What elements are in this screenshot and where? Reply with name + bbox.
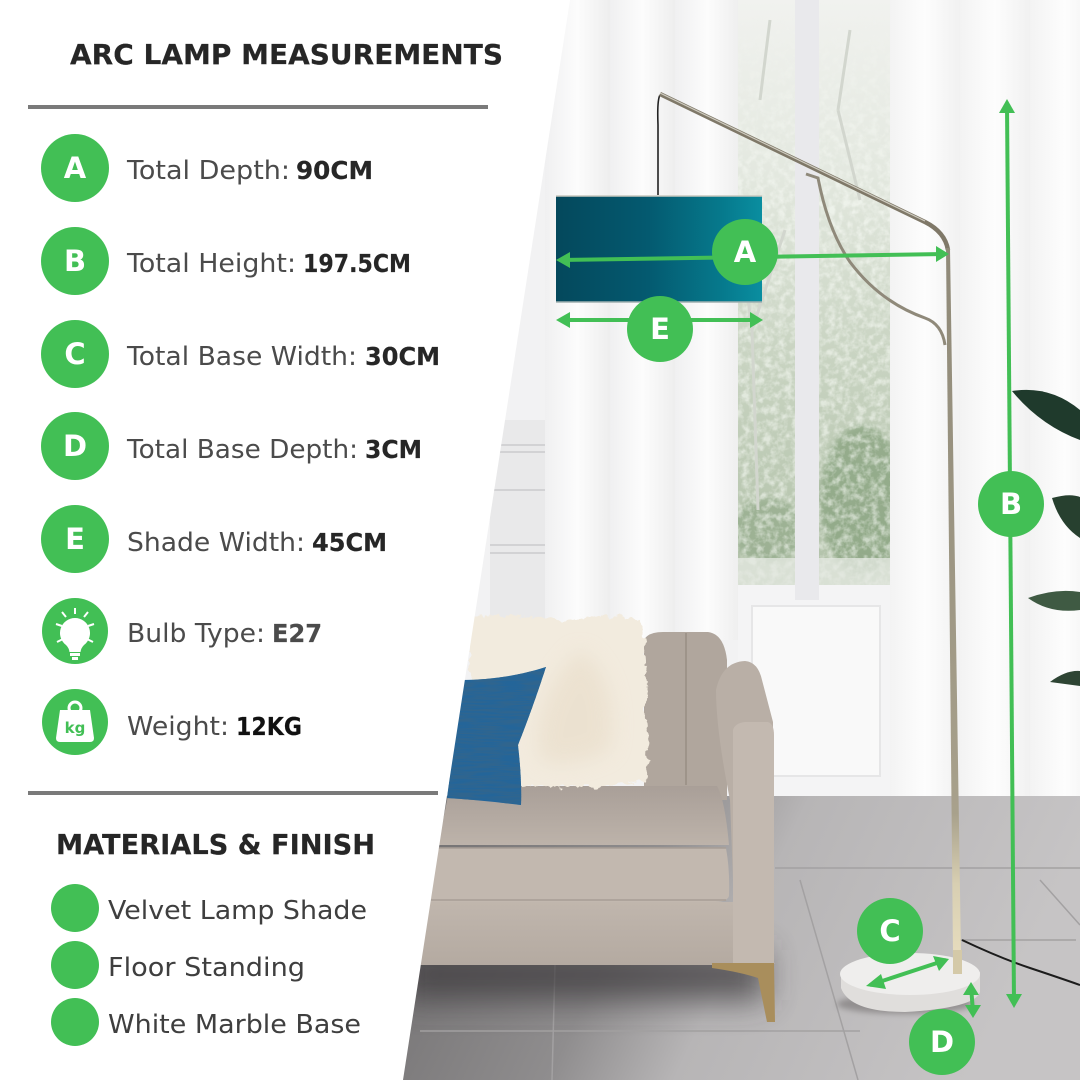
dimension D: base depth arrow: D bbox=[930, 1025, 954, 1059]
dimension E: shade width arrow: E bbox=[650, 312, 670, 346]
sofa seat front bbox=[430, 848, 729, 902]
row B: total height: Total Height: bbox=[126, 249, 296, 279]
row A: total depth: Total Depth: bbox=[126, 156, 290, 186]
material: velvet lamp shade: Velvet Lamp Shade bbox=[108, 896, 367, 926]
lamp base shadow bbox=[837, 994, 973, 1014]
dimension A: total depth arrow: A bbox=[734, 235, 757, 269]
dimension C: base width arrow: C bbox=[879, 914, 901, 948]
dimension E: shade width arrow bbox=[556, 296, 763, 362]
sofa leg bbox=[712, 963, 775, 1022]
materials heading: MATERIALS & FINISH bbox=[56, 828, 375, 861]
row: weight: Weight: bbox=[127, 712, 229, 742]
photo scene: living room bbox=[400, 0, 1080, 1080]
row A: total depth bbox=[41, 134, 373, 202]
divider bottom bbox=[28, 791, 438, 795]
dimension D: base depth arrow bbox=[909, 982, 981, 1075]
dimension C: base width arrow bbox=[857, 898, 949, 989]
material: floor standing: Floor Standing bbox=[108, 953, 305, 983]
blue cushion bbox=[447, 667, 546, 805]
row A: total depth: A bbox=[64, 151, 87, 185]
lamp pole foot bbox=[953, 950, 962, 974]
row D: total base depth: D bbox=[63, 429, 87, 463]
row: weight: 12KG bbox=[236, 712, 302, 741]
row B: total height: 197.5CM bbox=[303, 249, 411, 278]
sofa bbox=[418, 615, 775, 1022]
icon: kg weight: kg bbox=[65, 719, 85, 737]
left curtain bbox=[545, 0, 738, 640]
measurements list bbox=[41, 134, 440, 755]
row C: total base width: 30CM bbox=[365, 342, 440, 371]
row C: total base width: Total Base Width: bbox=[126, 342, 357, 372]
window with trees bbox=[738, 20, 890, 585]
material: white marble base: White Marble Base bbox=[108, 1010, 361, 1040]
white diagonal text panel bbox=[0, 0, 570, 1080]
row: weight bbox=[42, 689, 302, 755]
materials list bbox=[51, 884, 367, 1046]
power cord bbox=[962, 940, 1080, 985]
dimension B: total height arrow bbox=[978, 99, 1044, 1008]
material: velvet lamp shade bbox=[51, 884, 367, 932]
lamp pendant cable bbox=[658, 95, 660, 195]
window mullion bbox=[795, 0, 819, 600]
sofa seat bbox=[438, 786, 729, 845]
row: bulb type: Bulb Type: bbox=[127, 619, 265, 649]
lamp support arm bbox=[806, 174, 945, 345]
row: bulb type bbox=[42, 598, 322, 664]
row B: total height bbox=[41, 227, 411, 295]
sofa back bbox=[644, 632, 727, 800]
row E: shade width: 45CM bbox=[312, 528, 387, 557]
sofa base bbox=[418, 902, 735, 965]
row E: shade width: Shade Width: bbox=[127, 528, 305, 558]
row: bulb type: E27 bbox=[272, 619, 322, 648]
arc lamp bbox=[556, 93, 1080, 1014]
dimension A: total depth arrow bbox=[556, 219, 949, 285]
lamp pole bbox=[946, 248, 961, 955]
plant leaves bbox=[1012, 390, 1080, 686]
row A: total depth: 90CM bbox=[296, 156, 373, 185]
right curtain bbox=[890, 0, 1080, 798]
icon: kg weight bbox=[56, 702, 94, 742]
row D: total base depth: Total Base Depth: bbox=[126, 435, 358, 465]
row D: total base depth bbox=[41, 412, 422, 480]
sofa arm bbox=[716, 661, 775, 964]
dimension B: total height arrow: B bbox=[1000, 487, 1022, 521]
icon: light bulb bbox=[56, 608, 94, 660]
lamp shade bbox=[556, 196, 762, 302]
row C: total base width bbox=[41, 320, 440, 388]
back wall and window panels bbox=[400, 0, 1080, 800]
material: white marble base bbox=[51, 998, 361, 1046]
row D: total base depth: 3CM bbox=[365, 435, 422, 464]
row E: shade width bbox=[41, 505, 387, 573]
marble base bbox=[841, 972, 980, 1012]
row B: total height: B bbox=[64, 244, 86, 278]
row C: total base width: C bbox=[64, 337, 86, 371]
lamp arm bbox=[660, 94, 948, 250]
row E: shade width: E bbox=[65, 522, 85, 556]
title: ARC LAMP MEASUREMENTS bbox=[70, 38, 503, 71]
divider top bbox=[28, 105, 488, 109]
fur cushion bbox=[470, 615, 648, 788]
material: floor standing bbox=[51, 941, 305, 989]
floor with tiles bbox=[400, 796, 1080, 1080]
